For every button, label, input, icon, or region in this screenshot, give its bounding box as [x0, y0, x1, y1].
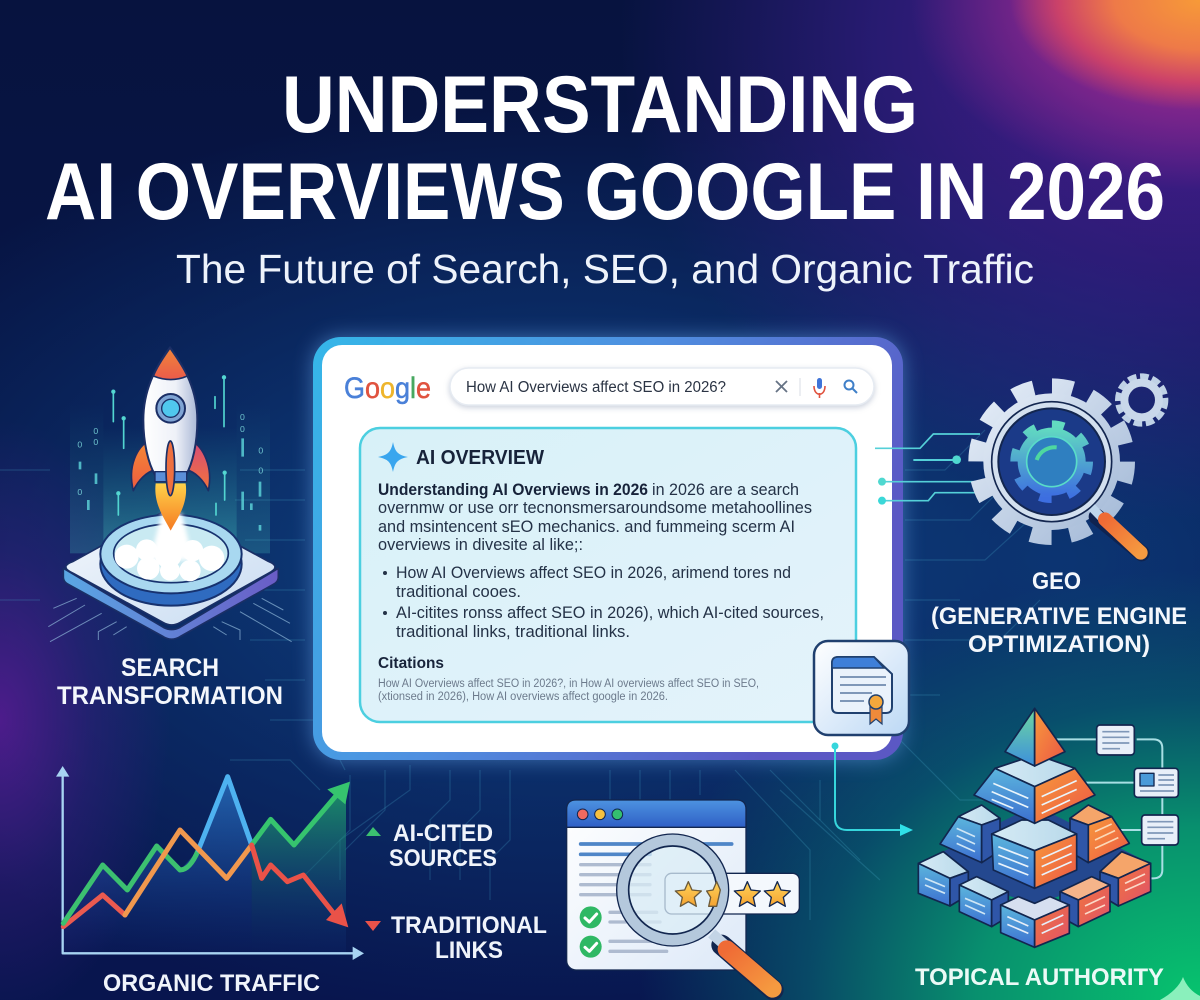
label: geo — [931, 568, 1187, 658]
overview paragraph: Understanding AI Overviews in 2026 — [378, 481, 648, 499]
title: UNDERSTANDING — [282, 60, 918, 150]
icon: rocket launching from platform: 0 — [258, 445, 263, 455]
icon: certificate document — [814, 641, 909, 735]
citations text: How AI Overviews affect SEO in 2026?, in How AI overviews affect SEO in SEO, — [378, 678, 759, 690]
overview bullet list: AI-citites ronss affect SEO in 2026), which AI-cited sources, — [396, 604, 824, 622]
panel: google search card — [313, 337, 903, 760]
sub: doc card two — [1134, 768, 1178, 797]
search bar: How AI Overviews affect SEO in 2026? — [466, 379, 726, 396]
icon: rocket launching from platform: 0 — [240, 412, 245, 422]
sub: left tier block — [940, 805, 1000, 863]
legend: traditional links: LINKS — [435, 937, 503, 964]
legend: ai-cited sources: AI-CITED — [393, 820, 493, 847]
overview paragraph: overviews in divesite al like;: — [378, 536, 583, 554]
label: geo: (GENERATIVE ENGINE — [931, 603, 1187, 630]
overview paragraph — [378, 481, 812, 554]
overview paragraph: and msintencent sEO mechanics. and fummeing scerm AI — [378, 518, 795, 536]
arrow: certificate to topical authority — [832, 742, 913, 836]
citations text: (xtionsed in 2026), How AI overviews affect google in 2026. — [378, 691, 668, 703]
citations text — [378, 678, 759, 703]
legend: traditional links — [365, 912, 547, 964]
legend: traditional links: TRADITIONAL — [391, 912, 547, 939]
icon: topical authority pyramid — [918, 708, 1178, 947]
icon: rocket launching from platform: 0 — [77, 439, 82, 449]
subtitle: The Future of Search, SEO, and Organic Traffic — [176, 246, 1034, 292]
title — [45, 60, 1165, 237]
overview bullet list: traditional links, traditional links. — [396, 623, 630, 641]
overview paragraph: in 2026 are a search — [652, 481, 799, 499]
search bar — [450, 368, 874, 405]
legend: ai-cited sources: SOURCES — [389, 845, 497, 872]
icon: rocket launching from platform: 0 — [240, 424, 245, 434]
citations heading: Citations — [378, 655, 444, 672]
sub: base block right — [1100, 852, 1151, 906]
overview bullet list: How AI Overviews affect SEO in 2026, arimend tores nd — [396, 564, 791, 582]
label: search transformation: SEARCH — [121, 654, 219, 682]
icon: rocket launching from platform: 0 — [258, 465, 263, 475]
sub: pyramid tip — [1005, 708, 1065, 766]
label: geo: GEO — [1032, 568, 1081, 595]
chart: organic traffic — [56, 766, 364, 960]
sub: second tier — [974, 758, 1095, 823]
label: topical authority: TOPICAL AUTHORITY — [915, 964, 1164, 991]
heading: ai overview: AI OVERVIEW — [416, 447, 544, 469]
sub: base block left — [918, 852, 968, 906]
sub: central block — [992, 820, 1077, 888]
icon: browser window with magnifier and stars — [567, 800, 799, 990]
icon: sparkle — [378, 442, 408, 472]
icon: rocket launching from platform — [48, 347, 292, 642]
legend: ai-cited sources — [366, 820, 497, 872]
icon: rocket launching from platform: 0 — [93, 426, 98, 436]
icon: rocket launching from platform: 0 — [77, 487, 82, 497]
sub: base block front-right — [1060, 877, 1110, 927]
sub: right tier block — [1070, 805, 1129, 863]
google logo: Google — [344, 372, 431, 405]
sub: base block front — [1001, 897, 1069, 947]
sub: doc card one — [1097, 725, 1134, 755]
panel: ai overview box — [360, 428, 856, 722]
overview bullet list — [383, 564, 824, 641]
sub: doc card three — [1142, 815, 1178, 845]
overview bullet list: traditional cooes. — [396, 583, 521, 601]
label: search transformation: TRANSFORMATION — [57, 682, 283, 710]
icon: rocket launching from platform: 0 — [93, 437, 98, 447]
label: organic traffic: ORGANIC TRAFFIC — [103, 970, 320, 997]
icon: gear with magnifier — [875, 378, 1164, 553]
label: search transformation — [57, 654, 283, 710]
overview paragraph: overnmw or use orr tecnonsmersaroundsome metahoollines — [378, 499, 812, 517]
label: geo: OPTIMIZATION) — [968, 631, 1150, 658]
sub: base block front-left — [959, 877, 1008, 927]
